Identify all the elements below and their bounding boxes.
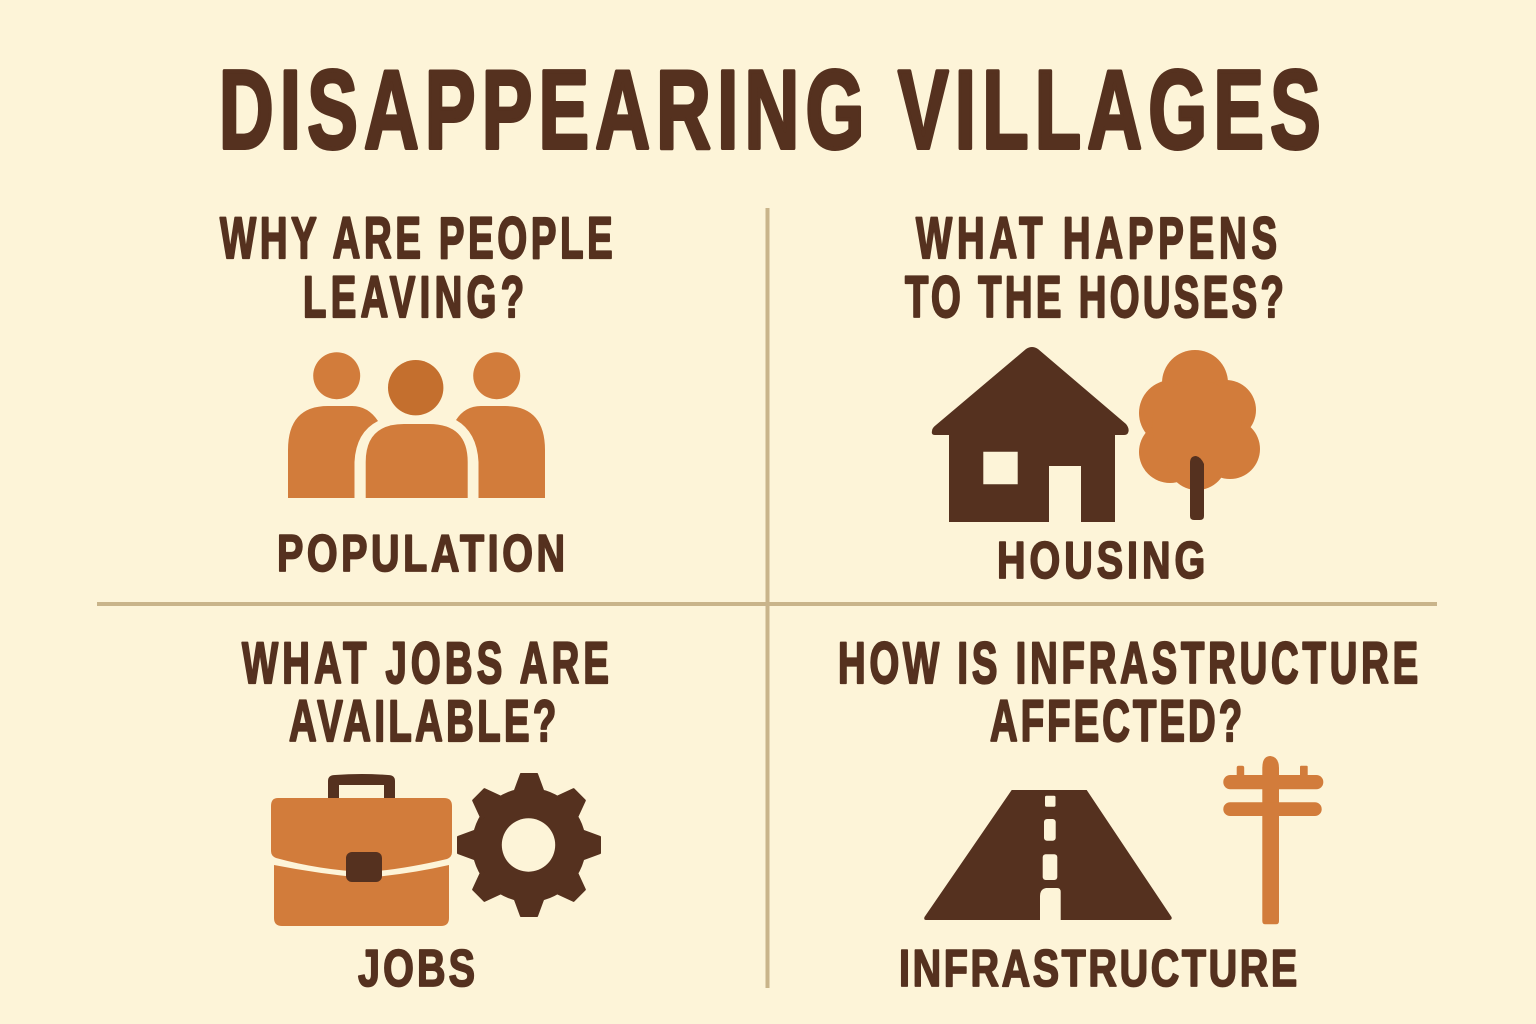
label: housing: HOUSING [997,531,1205,589]
heading: why are people leaving [220,207,613,330]
icon: utility pole [1223,756,1323,924]
panel: housing [905,207,1284,589]
heading: how is infrastructure affected [838,632,1418,754]
icon: road [924,790,1172,920]
icon: people group [288,352,545,498]
icon: house [932,347,1129,522]
icon: briefcase [271,774,452,926]
icon: tree [1139,350,1260,520]
heading: what jobs are available: WHAT JOBS ARE [242,632,609,696]
label: jobs: JOBS [358,939,475,997]
heading: what jobs are available: AVAILABLE? [289,690,556,754]
panel: infrastructure [838,632,1418,997]
heading: why are people leaving: WHY ARE PEOPLE [220,207,613,271]
heading: how is infrastructure affected: AFFECTED? [990,690,1242,754]
panel: population [220,207,613,582]
icon: gear [458,774,600,916]
heading: why are people leaving: LEAVING? [303,266,524,330]
heading: how is infrastructure affected: HOW IS INFRASTRUCTURE [838,632,1418,696]
title: DISAPPEARING VILLAGES [219,49,1321,173]
heading: what happens to the houses: WHAT HAPPENS [916,207,1277,271]
panel: jobs [242,632,609,997]
heading: what happens to the houses: TO THE HOUSES? [905,266,1284,330]
label: population: POPULATION [277,524,565,582]
heading: what jobs are available [242,632,609,754]
heading: what happens to the houses [905,207,1284,330]
label: infrastructure: INFRASTRUCTURE [899,939,1297,997]
